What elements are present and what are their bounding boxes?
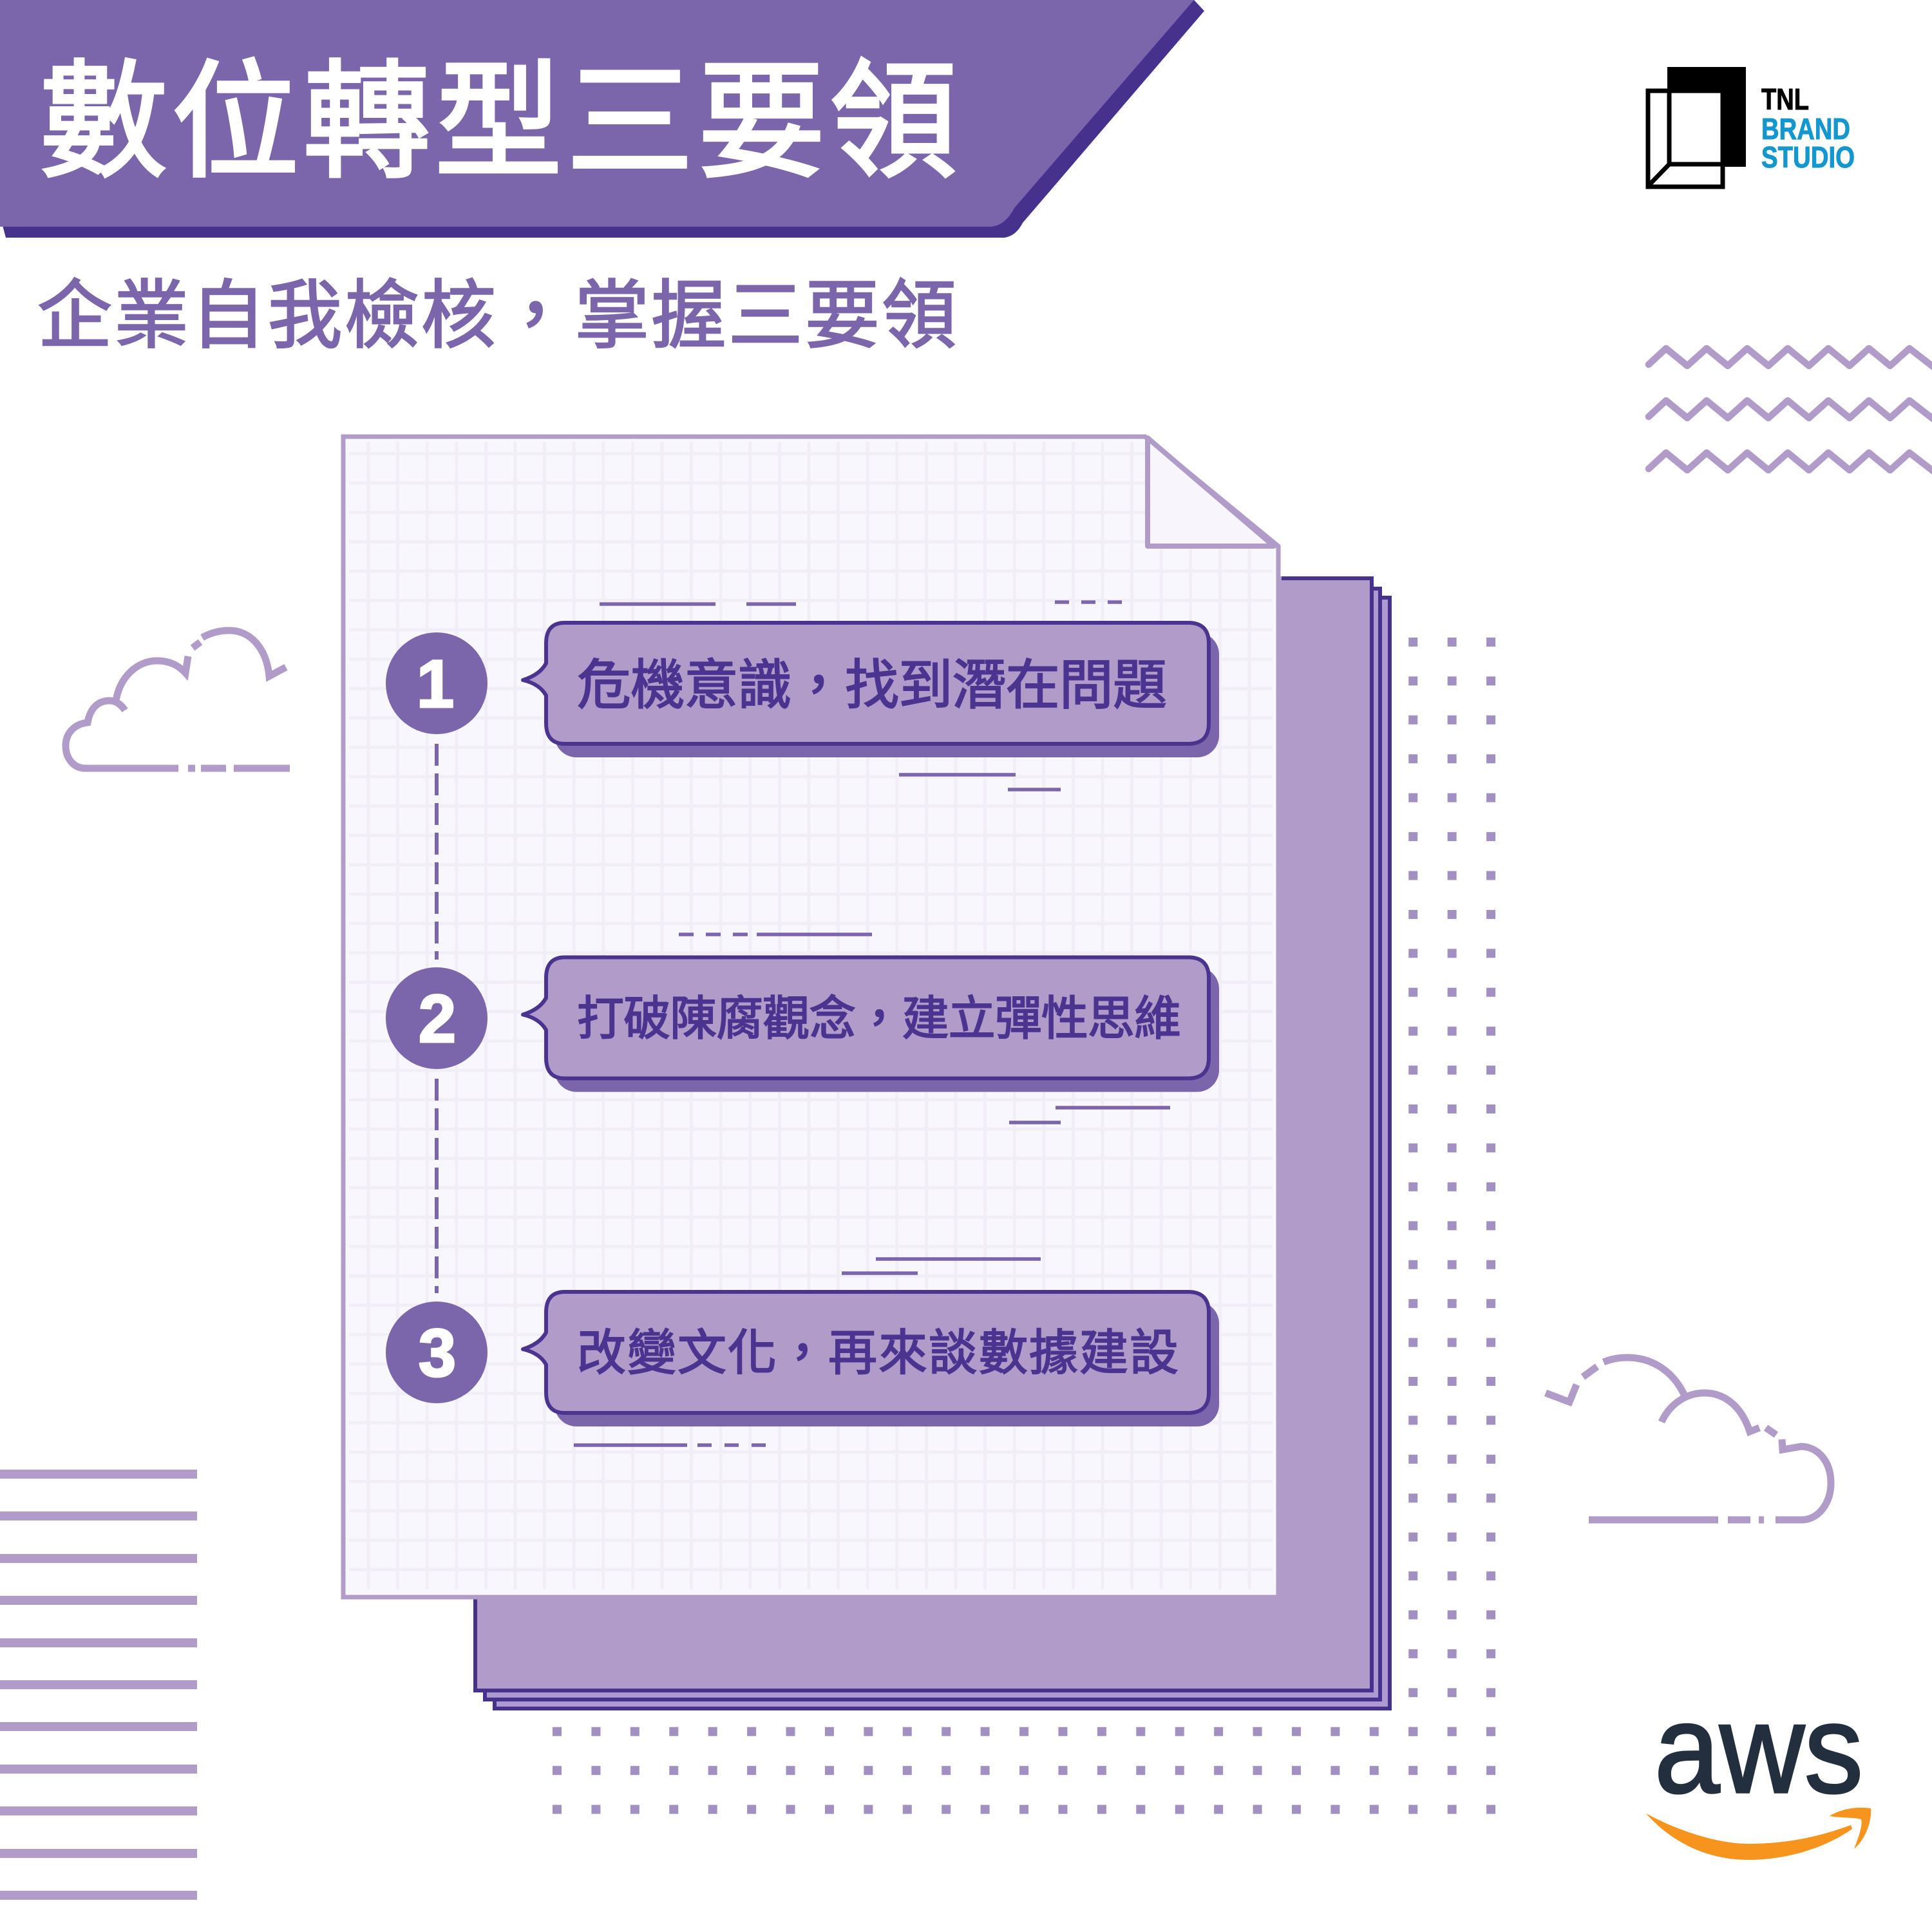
logo text [1761,82,1855,174]
cloud right [1546,1358,1831,1520]
cloud left [66,630,290,768]
number badge 3 [386,1302,488,1403]
title banner [0,0,1204,238]
callout 2 [523,957,1219,1092]
logo text: STUDIO [1761,140,1855,174]
stacked back pages [475,578,1390,1709]
title: 數位轉型三要領 [40,51,957,193]
page edge right and bottom fill [475,576,1282,1599]
number badge 1 [386,632,488,734]
step 1 [386,623,1219,757]
subtitle: 企業自我檢核，掌握三要領 [37,274,956,357]
step 3 [386,1292,1219,1426]
number badge 3: 3 [419,1316,456,1391]
graph paper grid [349,442,1273,1589]
step 2 [386,957,1219,1092]
callout 3 [523,1292,1219,1426]
logo text: TNL [1761,82,1809,116]
dot pattern [547,634,1501,1819]
number badge 2: 2 [419,981,456,1057]
document page [343,437,1282,1599]
stripes decoration [0,1470,197,1900]
callout 2: 打破陳腐觀念，建立彈性思維 [577,993,1181,1045]
connector dashes [435,744,439,1293]
logo: TNL Brand Studio [1648,67,1855,187]
logo text: BRAND [1761,112,1850,146]
number badge 1: 1 [417,647,454,722]
AWS smile arrow [1646,1808,1871,1860]
number badge 2 [386,967,488,1069]
callout 3: 改變文化，再來談數據建設 [577,1326,1179,1381]
folded corner [1148,438,1274,546]
callout 1 [523,623,1219,757]
accent dashes around callouts [574,602,1170,1445]
zigzag decoration [1649,348,1932,473]
logo: AWS: aws [1654,1678,1863,1819]
callout 1: 危機意識，找到潛在問題 [577,655,1167,715]
